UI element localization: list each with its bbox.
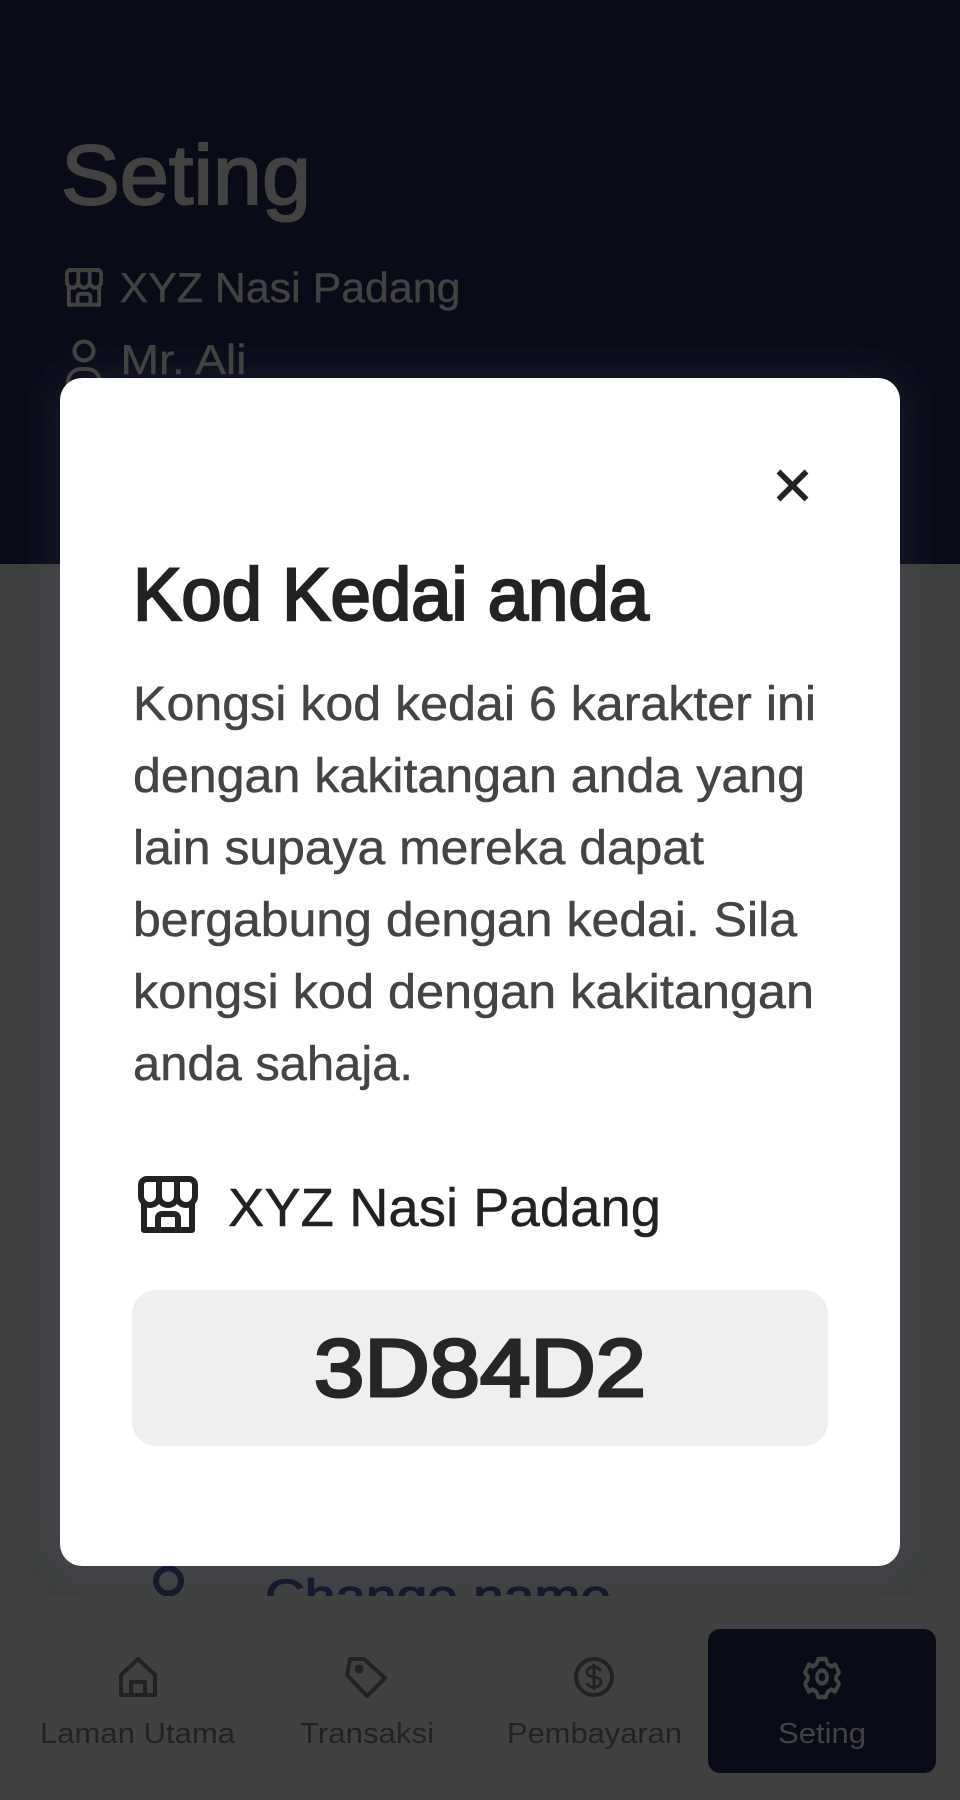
icon: person in list row <box>156 1568 181 1594</box>
list row clipped behind modal and nav <box>153 1566 609 1596</box>
store name row <box>141 1178 661 1238</box>
panel: bottom navigation <box>0 1596 960 1800</box>
icon: store small <box>67 270 101 305</box>
icon: close button <box>778 472 806 500</box>
text: change name: Change name <box>265 1570 611 1622</box>
modal card <box>60 378 900 1566</box>
label: home: Laman Utama <box>40 1718 236 1750</box>
panel: store code modal <box>60 378 900 1566</box>
icon: gear <box>805 1659 839 1697</box>
icon: home <box>121 1659 155 1695</box>
text block: modal description: Kongsi kod kedai 6 karakter ini <box>133 678 816 731</box>
text block: modal description: anda sahaja. <box>133 1038 413 1091</box>
icon: person small <box>68 342 100 392</box>
label: payments: Pembayaran <box>507 1718 682 1750</box>
nav background <box>0 1596 960 1800</box>
text block: modal description: kongsi kod dengan kakitangan <box>133 966 814 1019</box>
text: store code: 3D84D2 <box>314 1323 646 1414</box>
nav item: home <box>40 1659 236 1750</box>
panel: dimmed page body <box>0 564 960 1800</box>
label: transactions: Transaksi <box>300 1718 434 1750</box>
text: store name: XYZ Nasi Padang <box>228 1178 661 1238</box>
panel: dark header background <box>0 0 960 564</box>
text block: modal description <box>133 678 816 1091</box>
heading: modal title: Kod Kedai anda <box>133 553 650 636</box>
code box <box>132 1290 828 1446</box>
modal glow shadow <box>60 378 900 1566</box>
text block: modal description: dengan kakitangan anda yang <box>133 750 805 803</box>
nav item: settings active <box>778 1659 866 1750</box>
heading: page title Seting: Seting <box>61 128 311 222</box>
nav item: transactions <box>300 1659 434 1750</box>
icon: dollar coin <box>576 1659 612 1695</box>
nav item: payments <box>507 1659 682 1750</box>
text block: modal description: lain supaya mereka dapat <box>133 822 704 875</box>
header store row <box>67 264 461 311</box>
text: header store name: XYZ Nasi Padang <box>120 264 461 311</box>
header owner row <box>68 336 246 392</box>
icon: store <box>141 1179 195 1230</box>
text block: modal description: bergabung dengan kedai. Sila <box>133 894 797 947</box>
label: settings: Seting <box>778 1718 866 1750</box>
icon: tag <box>347 1659 385 1696</box>
text: header owner name: Mr. Ali <box>120 336 246 383</box>
code box background <box>132 1290 828 1446</box>
nav active tab highlight <box>708 1629 936 1773</box>
